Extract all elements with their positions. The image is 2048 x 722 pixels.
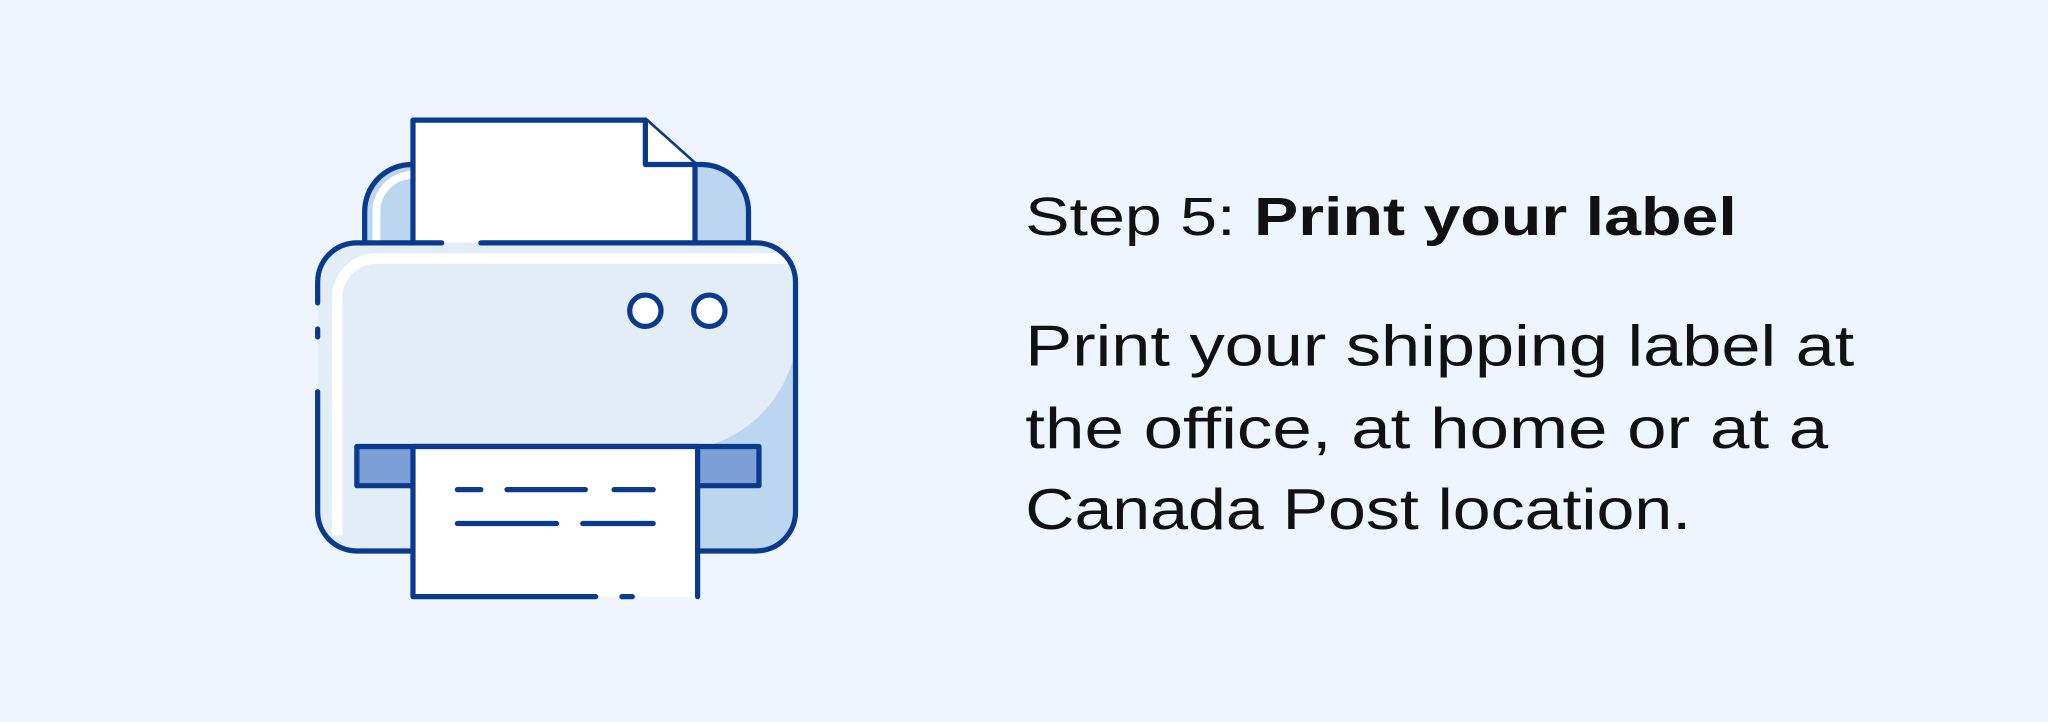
body text (1025, 315, 1854, 542)
printer body (318, 243, 797, 551)
body text: Print your shipping label at (1025, 315, 1854, 379)
output paper (413, 447, 698, 597)
back tray (365, 165, 749, 243)
body text: the office, at home or at a (1025, 397, 1828, 461)
heading: Step 5: Print your label (1025, 188, 1737, 247)
body text: Canada Post location. (1025, 478, 1691, 542)
buttons (630, 295, 725, 326)
top paper (413, 120, 695, 243)
icon: printer (318, 120, 797, 597)
paper slot (357, 447, 759, 486)
